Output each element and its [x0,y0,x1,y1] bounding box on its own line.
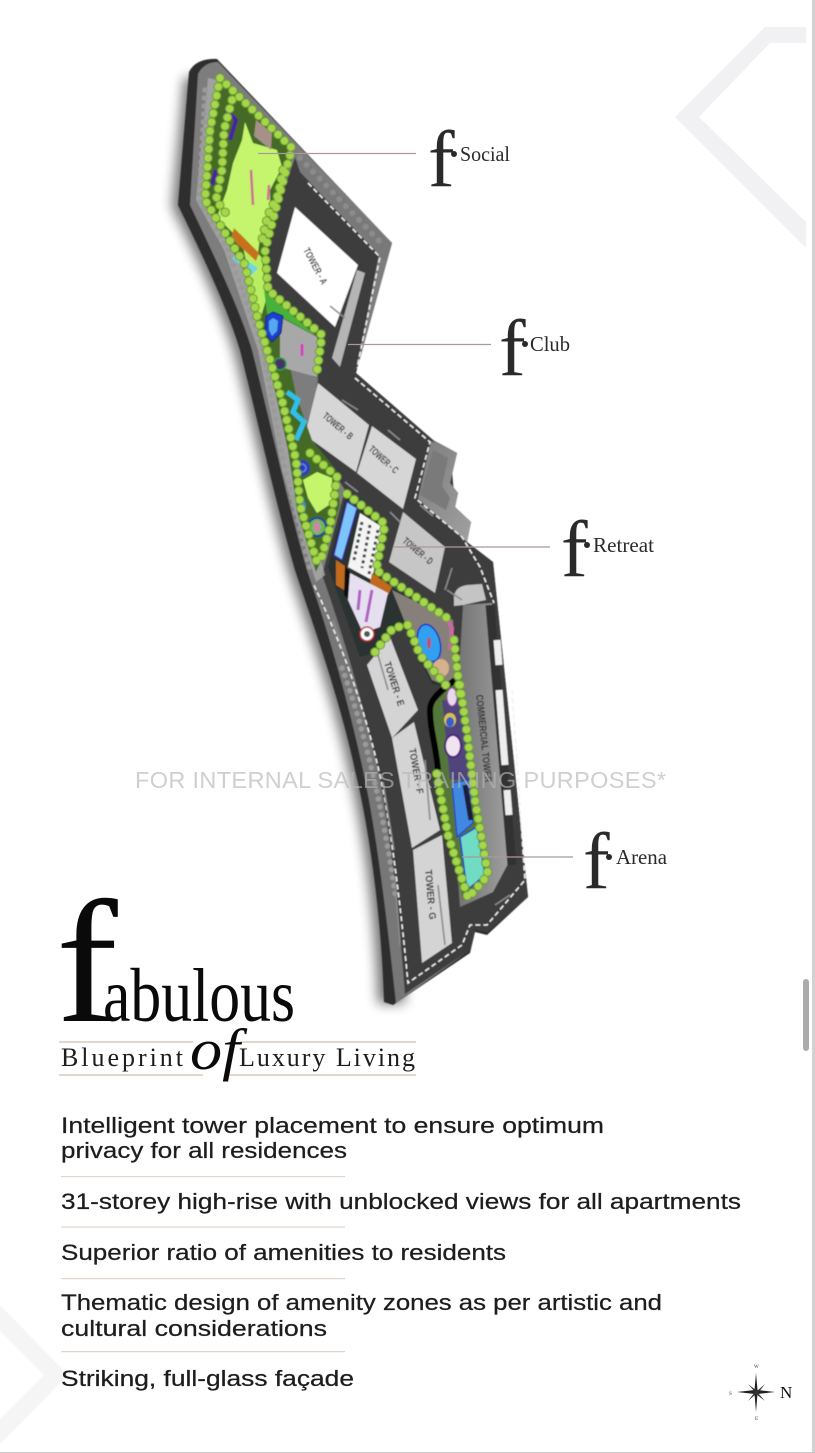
amenity strip base [432,680,487,900]
blue lagoon [413,622,445,664]
tower E [367,637,418,738]
compass: N [780,1383,792,1402]
commercial tower [452,584,512,907]
label: f Arena: f [583,818,610,906]
orange terrace [370,573,392,595]
heading: fabulous: f [56,866,119,1060]
tower A block [277,207,365,367]
leader line: Social [258,152,416,154]
decorative chevron: bottom left [0,1305,68,1444]
compass: W [754,1365,759,1370]
feature: tower placement: privacy for all residences [61,1138,347,1163]
site master plan map [172,59,528,1005]
tree lines [205,78,488,898]
label: f Club: Club [530,332,570,356]
label: f Social: Social [460,142,510,166]
tower F [392,722,440,848]
tagline: Blueprint of Luxury Living: of [190,1017,248,1082]
label: f Club [499,305,570,393]
decorative chevron: top right [675,27,806,248]
teal court [460,827,485,890]
tower G: TOWER - G [422,869,437,920]
feature: thematic design [61,1290,662,1341]
stepped parking block [418,441,471,542]
lawn fold [264,290,316,336]
sand garden [433,659,449,677]
tower A label: TOWER - A [300,246,329,287]
feature list [61,1113,741,1391]
ring plaza [308,518,326,536]
label: f Social: f [428,116,455,204]
tagline: Blueprint of Luxury Living [59,1017,416,1082]
map shadow [172,76,405,1004]
feature: tower placement [61,1113,604,1163]
road dashed markings [308,183,525,983]
leader line: Arena [462,856,573,858]
label: f Retreat [561,506,654,594]
lower club building [348,573,388,633]
sports courts [452,780,473,837]
label: f Social [428,116,510,204]
blue spiral [294,460,310,476]
tower D: TOWER - D [400,536,435,567]
commercial tower: COMMERCIAL TOWER [473,694,493,783]
compass [729,1365,792,1422]
playground circles [444,688,461,757]
feature: thematic design: cultural considerations [61,1316,327,1341]
site surface [190,62,528,1003]
label: f Arena: Arena [616,845,667,869]
label: f Club: f [499,305,526,393]
second lawn [303,472,332,513]
round feature [274,358,286,370]
orange deck [231,228,259,261]
top-right gray verge [292,148,392,262]
tower B: TOWER - B [320,411,355,442]
blue hexagon pavilion [265,312,283,342]
left light strip [196,78,325,582]
leader line: Retreat [393,546,550,548]
left pavement trees [199,90,396,900]
feature: glass facade: Striking, full-glass façade [61,1366,354,1391]
feature: tower placement: Intelligent tower placement to ensure optimum [61,1113,604,1138]
label: f Retreat: Retreat [593,533,654,557]
heading: fabulous [56,866,295,1060]
compass: S [729,1392,732,1397]
black walkway [430,680,455,770]
road network [262,155,528,994]
lawn upper [217,122,282,253]
heading: fabulous: abulous [103,954,295,1038]
cyan pool [232,254,258,275]
tagline: Blueprint of Luxury Living: Luxury Living [239,1043,415,1072]
feature: amenities ratio: Superior ratio of amenities to residents [61,1240,506,1265]
map base silhouette [178,59,528,1005]
park: dark planting under upper lawn [205,80,340,572]
tower D [389,512,445,593]
lawn strip [240,232,266,320]
gray plaza [280,317,317,377]
tagline: Blueprint of Luxury Living: Blueprint [61,1043,184,1072]
label: f Arena [583,818,667,906]
cyan water feature [287,392,304,440]
purple playground [442,700,470,780]
small blue pool [298,500,306,514]
feature: thematic design: Thematic design of amenity zones as per artistic and [61,1290,662,1315]
tower G [413,835,452,963]
leader line: Club [348,344,491,346]
tower E: TOWER - E [381,661,406,708]
compass: E [755,1417,758,1422]
tower B [305,383,369,472]
tower C: TOWER - C [366,444,400,476]
round court [360,627,374,641]
club building [348,513,382,580]
purple accents [212,110,278,215]
watermark: FOR INTERNAL SALES TRAINING PURPOSES* [135,767,666,793]
pavilion patch [254,120,272,150]
scrollbar thumb [803,979,809,1051]
tower F: TOWER - F [406,748,425,795]
amenity pool [334,502,357,560]
label: f Retreat: f [561,506,588,594]
amenity block base [328,492,462,690]
outer left dark road band [311,575,408,1003]
tower C [357,426,416,509]
feature: high-rise: 31-storey high-rise with unblocked views for all apartments [61,1189,741,1214]
terrace area [392,590,457,690]
